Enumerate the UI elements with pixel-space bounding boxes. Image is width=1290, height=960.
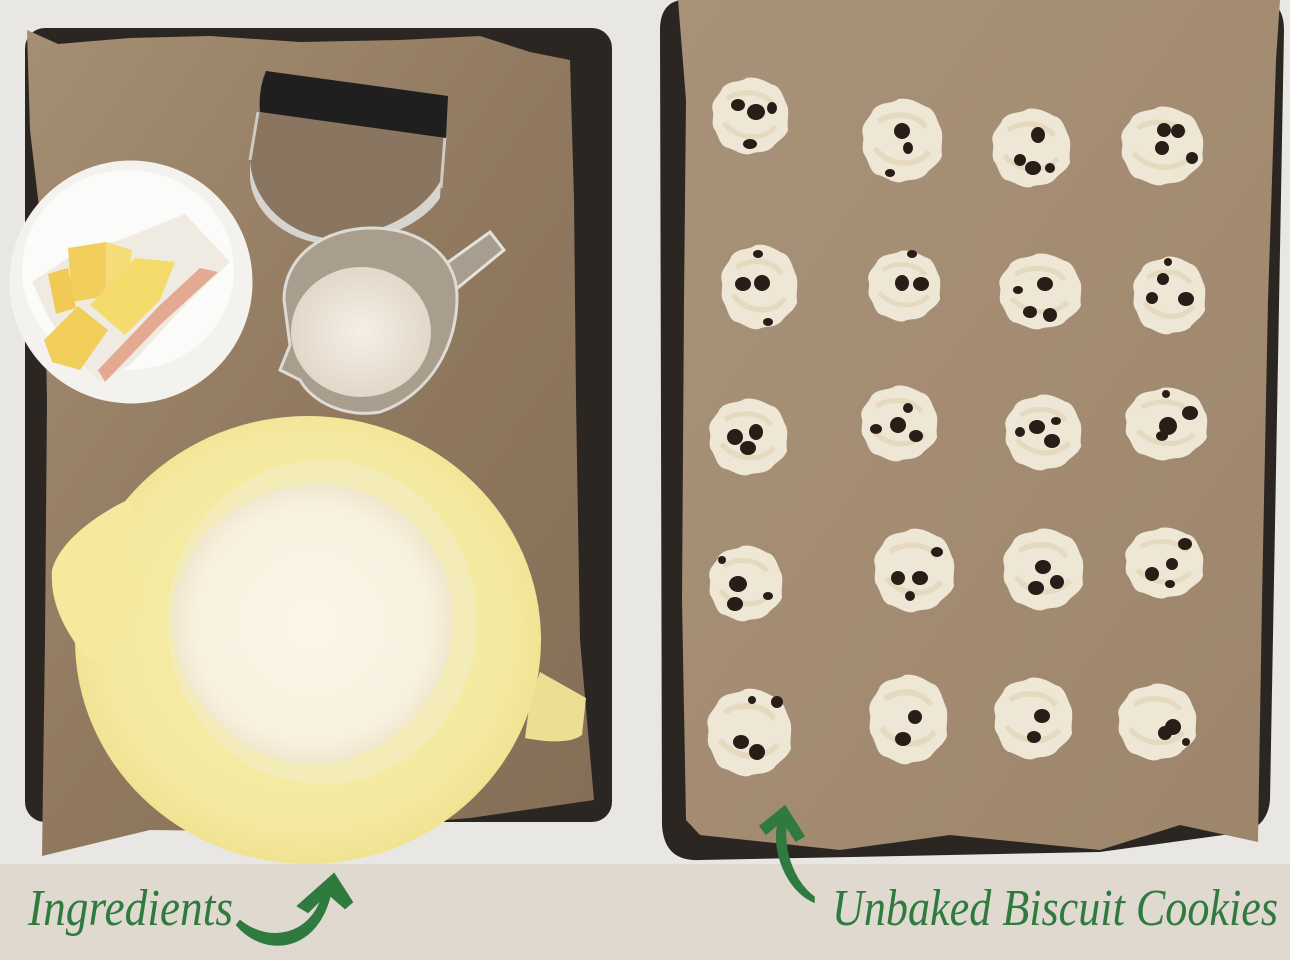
cookie grid xyxy=(707,78,1207,776)
flour mound xyxy=(172,484,453,764)
caption band xyxy=(0,864,1290,960)
icon: yellow mixing bowl with flour xyxy=(52,416,586,864)
right parchment paper xyxy=(678,0,1280,850)
icon: pastry cutter xyxy=(250,71,448,244)
butter cubes xyxy=(68,242,108,302)
panel: ingredients photo xyxy=(10,28,612,864)
left baking tray xyxy=(25,28,612,822)
icon: white bowl with butter xyxy=(10,160,252,404)
cookie row 2 xyxy=(721,245,1205,334)
cookie row 3 xyxy=(709,386,1207,475)
butter wrapper xyxy=(32,214,230,382)
bowl spout xyxy=(52,498,140,659)
right baking tray xyxy=(660,0,1284,860)
caption: Ingredients: Ingredients xyxy=(27,880,233,937)
bowl inner xyxy=(167,460,477,784)
bowl handle xyxy=(525,672,586,741)
left parchment paper xyxy=(27,30,594,856)
cookie row 1 xyxy=(712,78,1203,187)
panel: unbaked cookies photo xyxy=(660,0,1284,860)
arrow: pointing up to the ingredients xyxy=(237,874,352,945)
arrow: pointing up to the cookies xyxy=(760,806,814,902)
cookie row 4 xyxy=(709,527,1203,621)
icon: measuring cup of milk xyxy=(280,228,504,413)
bowl body xyxy=(75,416,541,864)
cookie row 5 xyxy=(707,675,1196,776)
